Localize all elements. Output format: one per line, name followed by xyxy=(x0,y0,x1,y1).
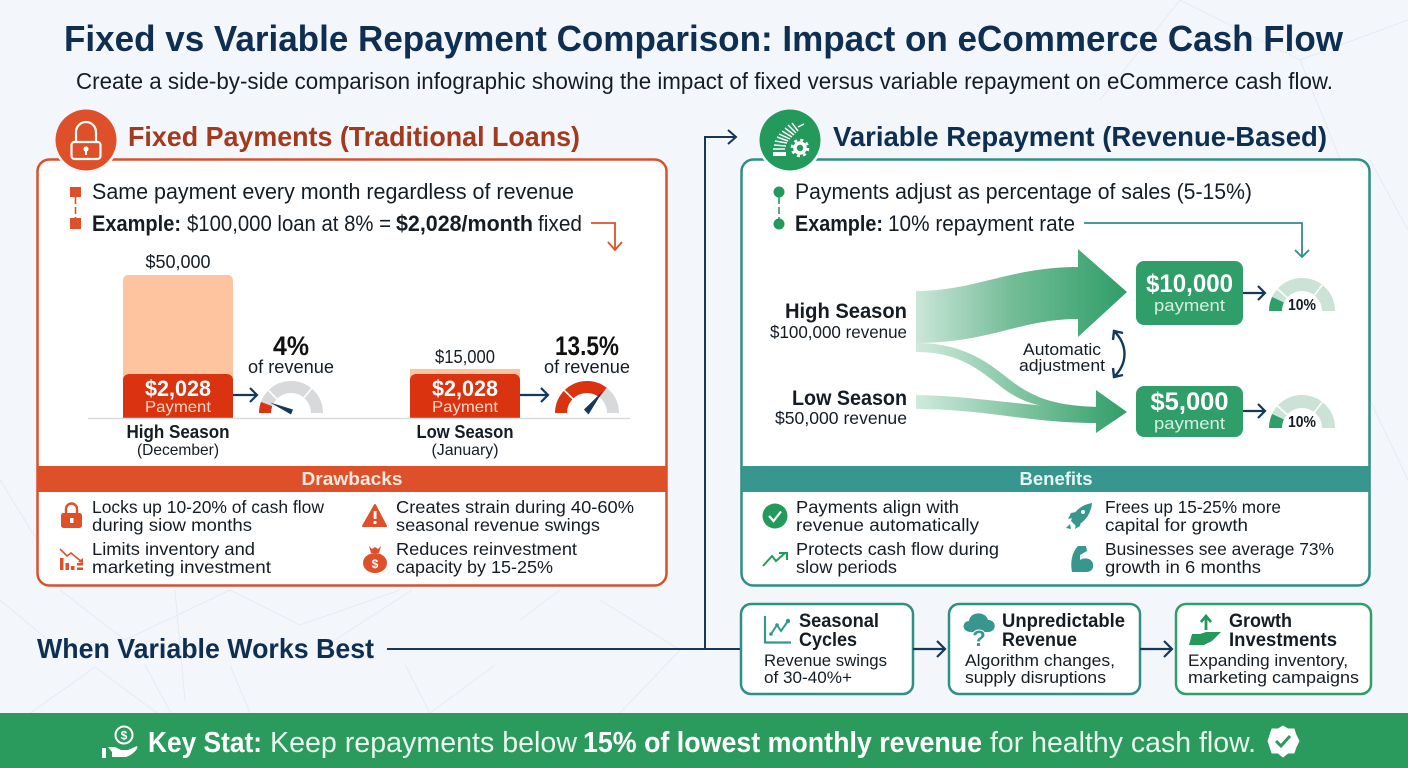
benefit: protects cash flow xyxy=(763,539,999,577)
gauge: 13.5 percent: 13.5% xyxy=(555,331,619,361)
label: high season: High Season xyxy=(126,422,230,442)
heading: variable repayment: Variable Repayment (Revenue-Based) xyxy=(833,121,1327,152)
benefit: align with revenue: Payments align with xyxy=(796,497,959,517)
gauge: high season 10 percent xyxy=(1276,284,1328,314)
icon: cloud with question mark: ? xyxy=(972,626,986,651)
card: growth investments: Growth xyxy=(1229,611,1292,632)
card: seasonal cycles xyxy=(741,604,913,694)
card: growth investments: Investments xyxy=(1229,630,1337,651)
bar: low season: $2,028 xyxy=(432,376,498,401)
bar: high season xyxy=(123,252,233,418)
bullet list: variable repayment: 10% repayment rate xyxy=(888,211,1075,236)
subtitle: Create a side-by-side comparison infographic showing the impact of fixed versus variable repayment on eCommerce cash flow. xyxy=(76,68,1333,94)
icon: hand with up arrow xyxy=(1189,616,1221,645)
footer: key stat: Key Stat: xyxy=(148,727,262,759)
label: high season xyxy=(126,422,230,459)
label: low season: (January) xyxy=(432,442,498,459)
drawback: reduces reinvestment: capacity by 15-25% xyxy=(396,557,553,577)
arrow: high payment to gauge xyxy=(1243,286,1265,300)
footer: key stat: for healthy cash flow. xyxy=(990,727,1256,759)
label: automatic adjustment xyxy=(1019,341,1105,375)
label: high season: (December) xyxy=(137,442,219,459)
bullet list: fixed payments xyxy=(70,179,582,236)
payment box: 10000: payment xyxy=(1154,296,1225,315)
bar: low season: Payment xyxy=(432,399,499,416)
bullet list: fixed payments: Same payment every month regardless of revenue xyxy=(92,179,574,204)
payment box: 5000: payment xyxy=(1154,414,1225,433)
bullet list: fixed payments: $2,028/month xyxy=(396,211,533,236)
benefits header xyxy=(742,466,1369,492)
benefit: average growth xyxy=(1071,539,1334,577)
benefit: average growth: Businesses see average 73% xyxy=(1105,539,1334,559)
benefit: protects cash flow: slow periods xyxy=(796,557,897,577)
benefit: frees up capital: Frees up 15-25% more xyxy=(1105,497,1281,517)
drawbacks header: Drawbacks xyxy=(302,469,402,489)
bar: high season: $50,000 xyxy=(146,252,210,272)
payment box: 10000: $10,000 xyxy=(1146,270,1233,298)
panel: fixed payments xyxy=(38,107,666,586)
arrow: high season to gauge xyxy=(233,388,257,402)
arrow: card one to card two xyxy=(913,641,945,657)
label: automatic adjustment: Automatic xyxy=(1023,341,1101,359)
drawback: limits investment xyxy=(60,539,271,577)
drawback: creates strain: Creates strain during 40-60% xyxy=(396,497,634,517)
gauge: low season 10 percent: 10% xyxy=(1288,414,1316,431)
icon: hand holding coin: $ xyxy=(121,728,128,742)
bullet list: fixed payments: $100,000 loan at 8% = xyxy=(187,211,391,236)
arrow: rate to gauge xyxy=(1084,223,1309,257)
label: high season revenue: High Season xyxy=(785,300,907,323)
flow: branch to low payment xyxy=(916,343,1100,411)
arrow: low payment to gauge xyxy=(1243,404,1265,418)
card: seasonal cycles: of 30-40%+ xyxy=(764,668,852,687)
benefit: frees up capital: capital for growth xyxy=(1105,515,1248,535)
gauge: low season 10 percent xyxy=(1276,402,1328,431)
gauge: 13.5 percent: of revenue xyxy=(544,357,630,377)
card: seasonal cycles: Cycles xyxy=(799,630,857,651)
panel: variable repayment xyxy=(742,107,1370,586)
drawback: locks up cash xyxy=(61,497,324,535)
benefit: average growth: growth in 6 months xyxy=(1105,557,1261,577)
label: automatic adjustment: adjustment xyxy=(1019,357,1105,375)
drawback: creates strain: seasonal revenue swings xyxy=(396,515,600,535)
section label: when variable works best: When Variable Works Best xyxy=(37,633,374,664)
drawback: limits investment: marketing investment xyxy=(92,557,271,577)
drawback: reduces reinvestment: $ xyxy=(372,557,379,571)
benefit: frees up capital xyxy=(1066,497,1281,535)
label: low season revenue xyxy=(775,387,907,428)
bullet list: variable repayment xyxy=(774,179,1252,236)
gauge: 4 percent xyxy=(248,331,334,414)
card: unpredictable revenue: Unpredictable xyxy=(1002,611,1125,632)
drawback: reduces reinvestment xyxy=(363,539,577,577)
arrow: card two to card three xyxy=(1140,641,1172,657)
bar: high season: $2,028 xyxy=(145,376,211,401)
flow: high season xyxy=(916,249,1127,343)
bar: high season: Payment xyxy=(145,399,212,416)
bullet list: variable repayment: Payments adjust as percentage of sales (5-15%) xyxy=(795,179,1252,204)
label: low season xyxy=(416,422,514,459)
icon: check badge xyxy=(1268,726,1299,757)
payment box: 5000: $5,000 xyxy=(1150,388,1228,416)
benefit: protects cash flow: Protects cash flow during xyxy=(796,539,999,559)
bar: low season xyxy=(410,347,520,418)
footer: key stat xyxy=(0,713,1408,768)
card: unpredictable revenue: supply disruptions xyxy=(965,668,1106,687)
arrow: two-way adjustment xyxy=(1113,331,1124,377)
label: low season revenue: $50,000 revenue xyxy=(775,408,907,428)
card: growth investments: marketing campaigns xyxy=(1188,668,1359,687)
label: high season revenue xyxy=(770,300,907,342)
arrow: low season to gauge xyxy=(520,388,548,402)
bar: low season: $15,000 xyxy=(435,347,495,367)
drawback: limits investment: Limits inventory and xyxy=(92,539,255,559)
drawback: creates strain xyxy=(363,497,634,535)
drawback: reduces reinvestment: Reduces reinvestment xyxy=(396,539,577,559)
icon: line chart xyxy=(765,616,791,642)
gauge: 4 percent: 4% xyxy=(273,331,309,361)
arrow: example to chart xyxy=(591,223,622,250)
heading: fixed payments: Fixed Payments (Traditional Loans) xyxy=(128,121,580,152)
footer: key stat: Keep repayments below xyxy=(270,727,578,759)
title: Fixed vs Variable Repayment Comparison: Impact on eCommerce Cash Flow xyxy=(64,18,1344,59)
bullet list: fixed payments: fixed xyxy=(538,211,582,236)
payment box: 10000 xyxy=(1136,261,1243,325)
icon: cloud with question mark xyxy=(964,613,995,651)
label: low season revenue: Low Season xyxy=(792,387,907,410)
card: seasonal cycles: Revenue swings xyxy=(764,651,887,670)
card: seasonal cycles: Seasonal xyxy=(799,611,879,632)
label: low season: Low Season xyxy=(416,422,514,442)
icon: spring and gear xyxy=(757,107,823,173)
drawback: locks up cash: Locks up 10-20% of cash flow xyxy=(92,497,324,517)
card: growth investments xyxy=(1176,604,1371,694)
icon: padlock xyxy=(53,107,119,173)
card: growth investments: Expanding inventory, xyxy=(1188,651,1348,670)
bullet list: variable repayment: Example: xyxy=(795,211,883,236)
connector: section label to cards and variable panel xyxy=(387,130,741,649)
card: unpredictable revenue xyxy=(949,604,1140,694)
gauge: 13.5 percent xyxy=(544,331,630,414)
payment box: 5000 xyxy=(1136,386,1243,437)
gauge: high season 10 percent: 10% xyxy=(1288,297,1316,314)
card: unpredictable revenue: Algorithm changes, xyxy=(965,651,1115,670)
benefit: align with revenue xyxy=(762,497,979,535)
footer: key stat: 15% of lowest monthly revenue xyxy=(583,727,982,759)
icon: hand holding coin xyxy=(102,726,137,758)
benefit: align with revenue: revenue automatically xyxy=(796,515,979,535)
bullet list: fixed payments: Example: xyxy=(92,211,181,236)
card: unpredictable revenue: Revenue xyxy=(1002,630,1077,651)
drawbacks header xyxy=(38,466,666,492)
gauge: 4 percent: of revenue xyxy=(248,357,334,377)
benefits header: Benefits xyxy=(1020,469,1092,489)
drawback: locks up cash: during siow months xyxy=(92,515,252,535)
label: high season revenue: $100,000 revenue xyxy=(770,322,907,342)
flow: low season xyxy=(916,390,1127,433)
